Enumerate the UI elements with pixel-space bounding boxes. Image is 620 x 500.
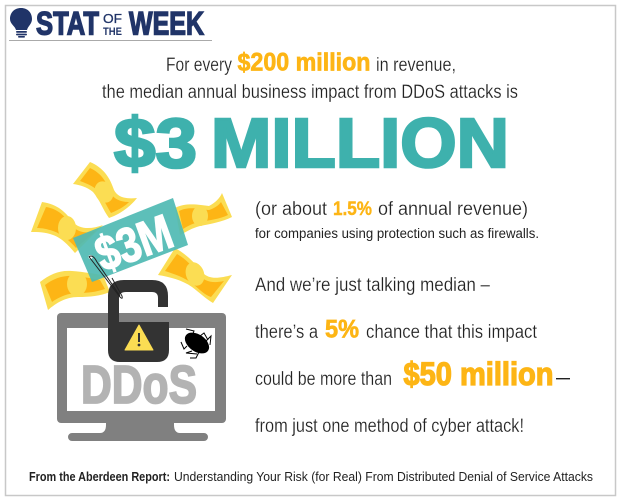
header: stat of the week: WEEK: [129, 6, 204, 42]
bill: top: [73, 162, 137, 218]
headline sentence: $200 million: [238, 48, 370, 76]
heading text: STAT: [36, 6, 99, 42]
text: median explanation: from just one method of cyber attack!: [255, 416, 524, 437]
icon: padlock: [108, 280, 169, 362]
text: percentage of revenue: of annual revenue): [378, 199, 528, 220]
text: median explanation: could be more than: [255, 369, 392, 390]
money tag: $3M: $3M: [88, 205, 180, 282]
icon: paperclip: [88, 255, 122, 298]
icon: bug: [181, 329, 212, 358]
text: percentage of revenue: for companies using protection such as firewalls.: [255, 226, 539, 241]
icon: warning triangle: [125, 325, 153, 350]
bill: right upper: [175, 193, 232, 235]
text: median explanation: [255, 275, 570, 437]
illustration: flying money: [31, 162, 232, 310]
bill: bottom left: [40, 271, 110, 310]
header: stat of the week: [9, 6, 212, 42]
text: median explanation: $50 million: [404, 356, 554, 392]
bill: right lower: [158, 248, 232, 303]
headline sentence: the median annual business impact from DDoS attacks is: [102, 82, 518, 103]
headline sentence: [102, 48, 518, 103]
icon: light bulb: [10, 8, 32, 38]
text: median explanation: chance that this impact: [366, 322, 538, 343]
header: stat of the week: OF: [103, 11, 122, 26]
headline sentence: in revenue,: [376, 55, 456, 76]
text: median explanation: 5%: [325, 316, 359, 344]
text: percentage of revenue: [255, 199, 539, 241]
header: stat of the week: THE: [103, 26, 122, 38]
text: percentage of revenue: (or about: [255, 199, 328, 220]
source footnote: From the Aberdeen Report:: [29, 470, 170, 484]
source footnote: Understanding Your Risk (for Real) From Distributed Denial of Service Attacks: [174, 470, 593, 484]
text: median explanation: And we’re just talking median –: [255, 275, 490, 296]
monitor frame: [57, 313, 226, 423]
DDoS label: DDoS: [81, 355, 197, 415]
bill: left: [31, 202, 103, 253]
big stat: $3 million: MILLION: [211, 104, 509, 182]
monitor stand: [68, 423, 208, 441]
text: percentage of revenue: 1.5%: [333, 199, 372, 220]
big stat: $3 million: $3: [114, 104, 197, 182]
headline sentence: For every: [166, 55, 232, 76]
illustration: monitor with DDoS: [57, 280, 226, 441]
text: median explanation: there’s a: [255, 322, 318, 343]
